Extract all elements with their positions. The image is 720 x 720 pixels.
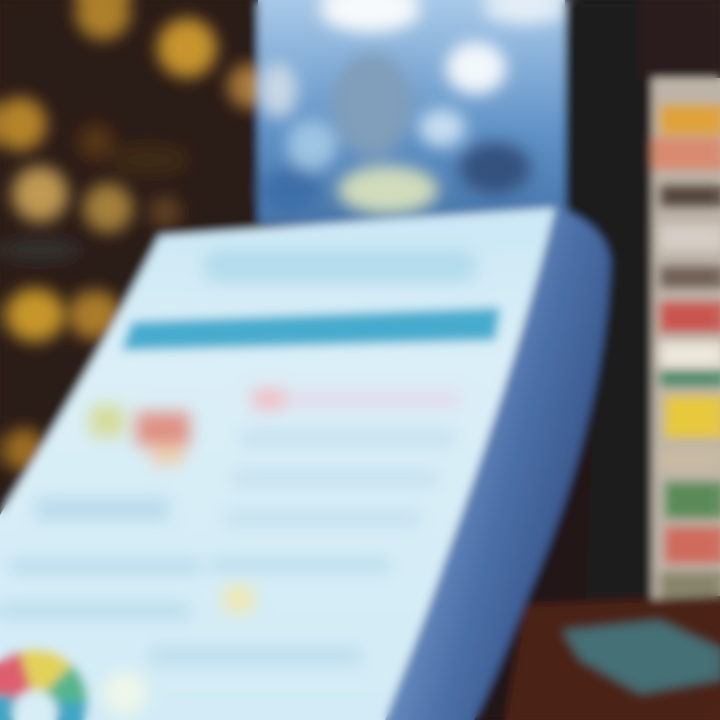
pillar: dark column <box>565 0 720 595</box>
window: blue sky and clouds <box>258 0 568 225</box>
chart: pie at bottom-left <box>0 650 87 720</box>
document contents <box>0 250 500 720</box>
text block: upper right lines <box>225 388 460 526</box>
banner: teal bar <box>122 308 500 350</box>
table: wooden surface and teal book <box>505 596 720 720</box>
marker: yellow highlight <box>224 586 254 612</box>
heading: blurred title <box>205 250 475 282</box>
chart: coloured squares <box>90 405 190 465</box>
document: blue curled page edge <box>360 208 610 720</box>
document: light paper sheet <box>0 208 555 720</box>
bookshelf: coloured stripes at right <box>652 78 720 608</box>
accent: pale patch beside pie <box>103 671 147 715</box>
bokeh lights: left window <box>0 0 272 500</box>
text block: left lines <box>0 497 390 664</box>
